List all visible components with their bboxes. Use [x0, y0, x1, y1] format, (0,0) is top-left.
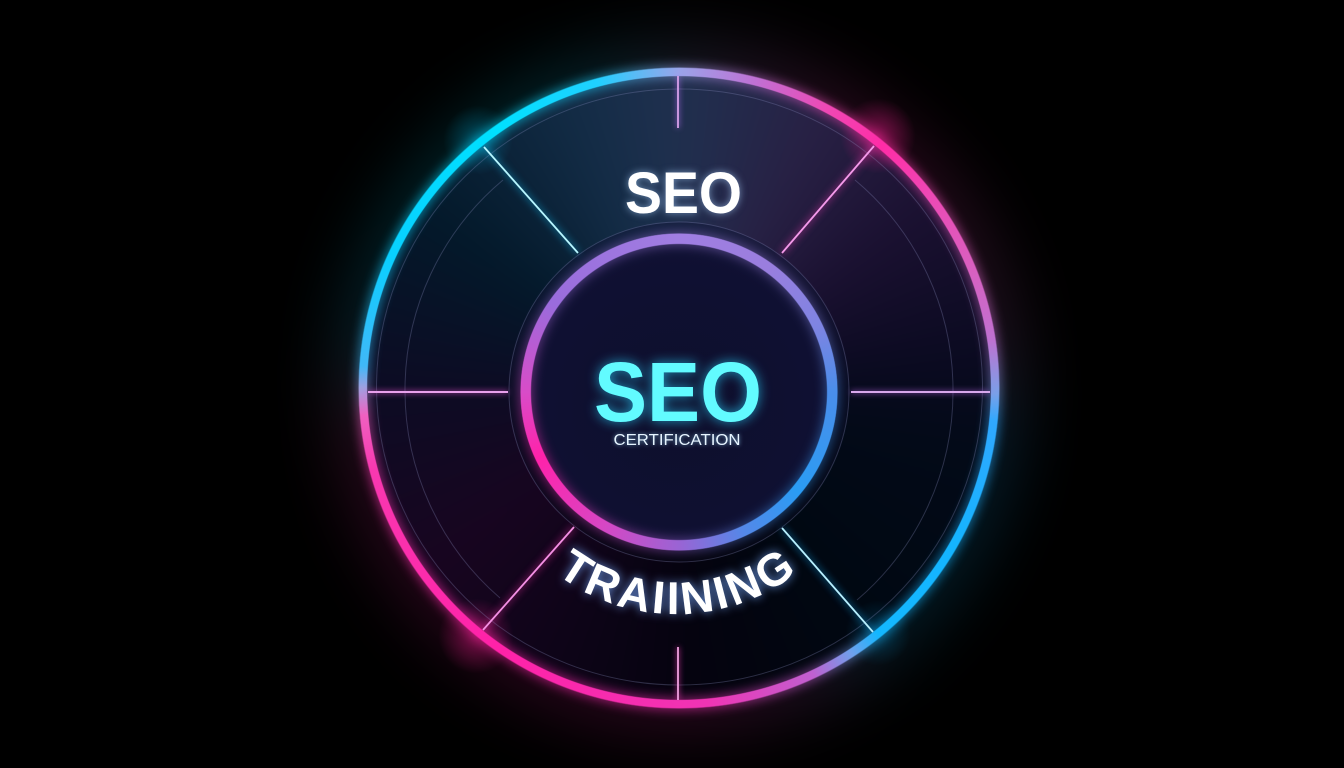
hot glow: bottom left: [438, 598, 514, 674]
heading: top SEO: SEO: [625, 161, 742, 226]
center hub backdrop: [509, 222, 849, 562]
divider line: bottom right: [782, 528, 873, 632]
divider line: top left: [484, 147, 578, 253]
ring glow: tight: [350, 58, 1008, 718]
divider line: bottom: [677, 647, 679, 700]
divider line: left: [368, 391, 508, 393]
heading: center SEO: SEO: [594, 345, 762, 439]
divider line: top: [677, 76, 679, 128]
hot glow: top left: [443, 105, 513, 175]
curve path for training label: [494, 494, 858, 614]
inner ring: [520, 233, 838, 551]
subheading: certification: CERTIFICATION: [614, 432, 740, 449]
hot glow: bottom right: [845, 600, 911, 666]
divider line: bottom left: [483, 527, 574, 630]
thin concentric arcs: [376, 89, 982, 685]
hot glow: top right: [840, 98, 916, 174]
ring glow: inner: [512, 226, 846, 558]
divider line: top right: [782, 146, 874, 253]
panel: wheel disc: [362, 71, 996, 705]
label: curved TRAIINING: TRAIINING: [560, 542, 799, 620]
center hub disc: [525, 238, 833, 546]
divider line: right: [851, 391, 990, 393]
ring glow: wide halo: [314, 22, 1045, 754]
outer ring: [358, 67, 1000, 709]
